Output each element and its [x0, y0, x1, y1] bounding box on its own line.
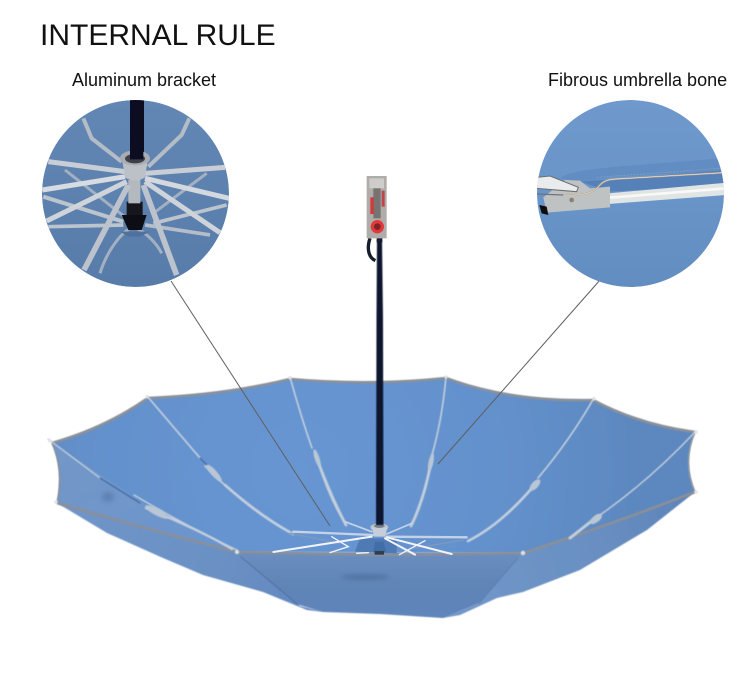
leader line to fibrous bone [438, 280, 600, 464]
handle body [367, 176, 387, 238]
brass wire [563, 173, 723, 195]
handle strap [368, 238, 375, 261]
illustration [42, 100, 724, 619]
open umbrella canopy [48, 176, 698, 618]
canopy outer lower panels [57, 492, 695, 618]
title: INTERNAL RULE [40, 19, 276, 52]
leader line to aluminum bracket [171, 281, 330, 526]
shaft [130, 100, 144, 152]
umbrella shaft [376, 240, 384, 525]
rib joints [144, 449, 604, 526]
circle: aluminum bracket closeup [42, 100, 229, 287]
canopy grey rim [52, 378, 695, 555]
label: fibrous umbrella bone: Fibrous umbrella bone [548, 70, 727, 90]
ribs [48, 377, 696, 550]
canopy inner surface [52, 378, 695, 553]
label: aluminum bracket: Aluminum bracket [72, 70, 216, 90]
upper struts [83, 118, 189, 167]
handle red button [371, 220, 384, 233]
main silver spokes [42, 162, 229, 275]
circle: fibrous umbrella bone closeup [537, 100, 727, 287]
inner wedge panel at left [52, 443, 237, 550]
dark runner [126, 202, 143, 215]
central hub struts [273, 522, 467, 555]
rod [537, 176, 578, 192]
fabric seam [560, 158, 727, 182]
white rib tube [608, 183, 727, 204]
rib tips [48, 376, 698, 555]
hub [120, 150, 150, 166]
thin back struts [43, 170, 227, 273]
umbrella handle [367, 176, 387, 261]
metal bracket [543, 180, 610, 213]
